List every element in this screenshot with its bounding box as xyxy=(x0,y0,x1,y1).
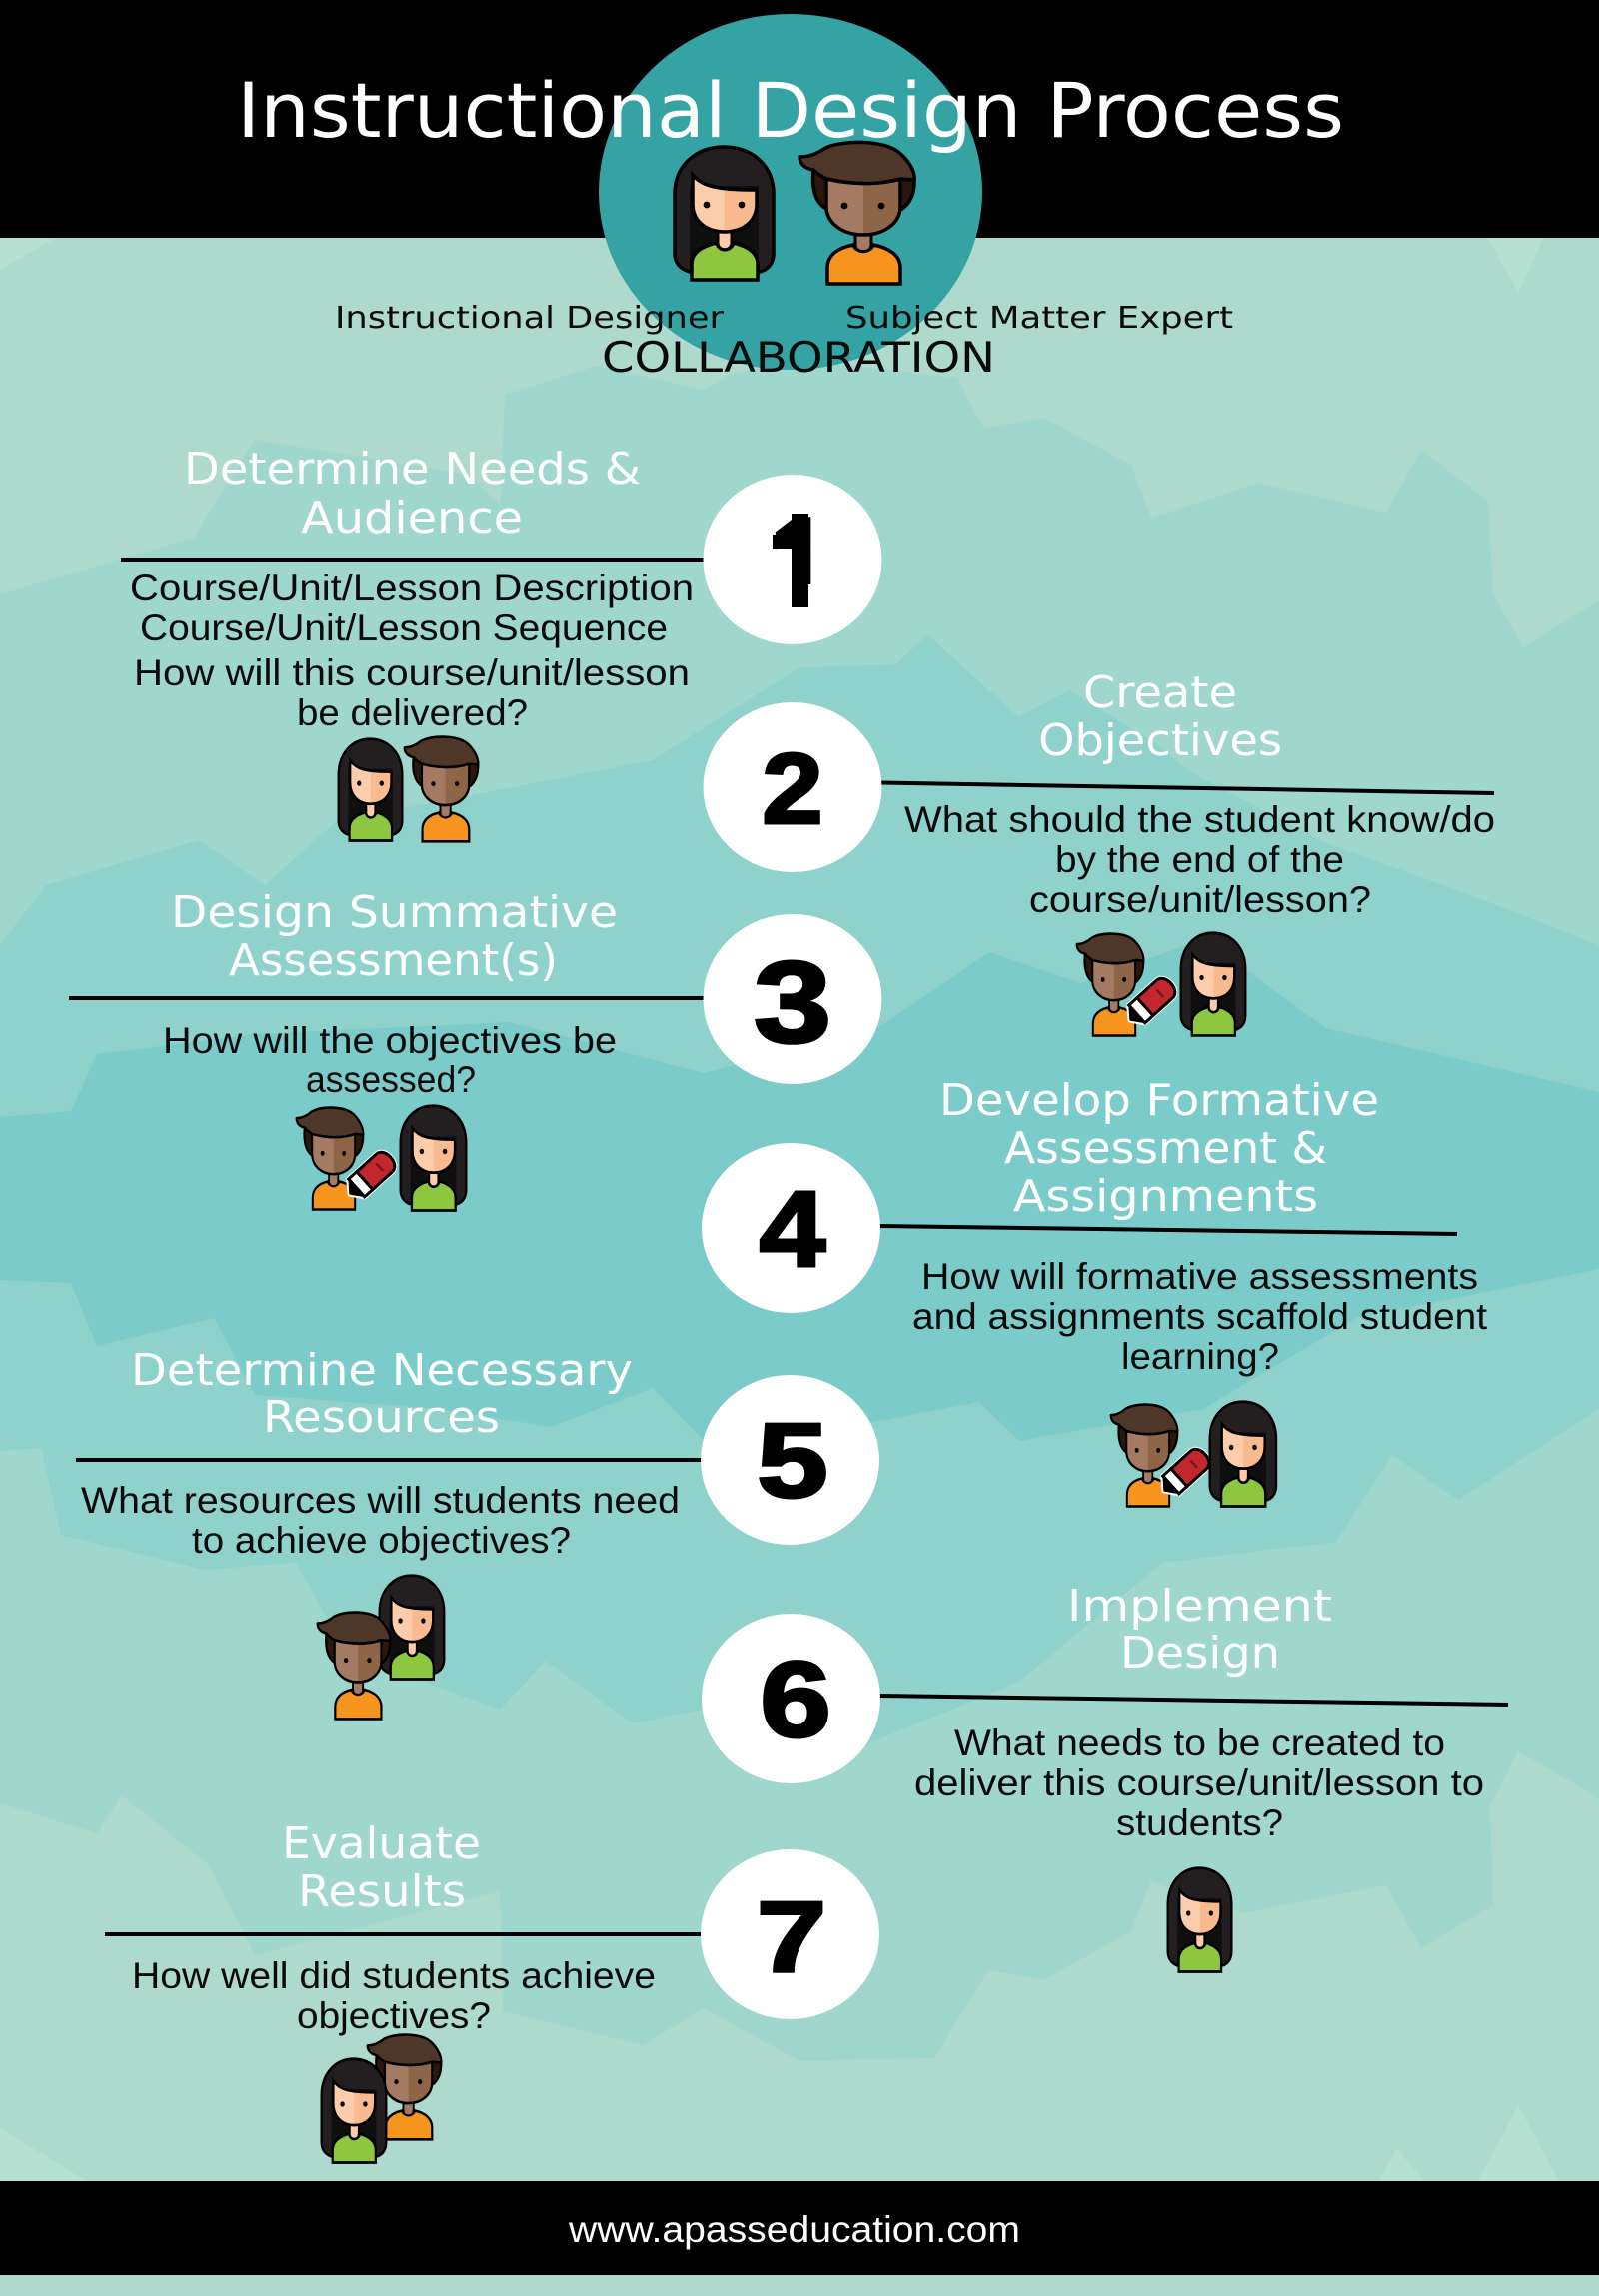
body text: How will the objectives be xyxy=(163,1020,617,1061)
body text: and assignments scaffold student xyxy=(912,1296,1488,1337)
connector line xyxy=(877,1696,1508,1705)
body text xyxy=(904,799,1495,920)
heading: Create xyxy=(1083,667,1237,718)
heading: Design Summative xyxy=(171,887,618,938)
number circle xyxy=(702,1614,880,1783)
heading: Implement xyxy=(1067,1581,1332,1632)
title: Instructional Design Process xyxy=(237,66,1344,155)
heading xyxy=(939,1075,1379,1222)
heading: Assessment & xyxy=(1004,1123,1327,1174)
footer url: www.apasseducation.com xyxy=(568,2209,1020,2250)
body text: to achieve objectives? xyxy=(192,1520,571,1561)
icon: subject matter expert xyxy=(800,142,914,284)
heading: Evaluate xyxy=(282,1818,481,1869)
icon: instructional designer xyxy=(675,147,774,280)
heading: Resources xyxy=(263,1392,500,1443)
body text: students? xyxy=(1116,1802,1283,1843)
body text: How will formative assessments xyxy=(921,1256,1478,1297)
icon: expert with pencil and designer xyxy=(1077,933,1245,1036)
body text: What resources will students need xyxy=(81,1480,680,1521)
body text xyxy=(912,1256,1488,1377)
body text: learning? xyxy=(1121,1336,1279,1377)
number circle xyxy=(701,1375,879,1545)
connector line xyxy=(877,1226,1457,1234)
header bar xyxy=(0,0,1599,238)
body text: be delivered? xyxy=(297,692,528,733)
body text xyxy=(81,1480,680,1561)
body text: How will this course/unit/lesson xyxy=(134,652,690,693)
panel: step 4 xyxy=(702,1075,1488,1507)
heading xyxy=(1067,1581,1332,1679)
body text: What should the student know/do xyxy=(904,799,1495,840)
teal collaboration circle xyxy=(599,14,982,370)
heading xyxy=(184,444,641,544)
panel: step 5 xyxy=(76,1345,879,1719)
body text: by the end of the xyxy=(1055,839,1344,880)
connector line xyxy=(105,1932,710,1936)
number circle: 7 xyxy=(757,1881,826,1993)
body text: Course/Unit/Lesson Sequence xyxy=(140,607,668,648)
connector line xyxy=(879,783,1494,793)
heading: Objectives xyxy=(1038,715,1282,766)
number circle: 2 xyxy=(762,734,823,845)
panel: step 3 xyxy=(69,887,881,1210)
heading: Assignments xyxy=(1013,1171,1318,1222)
heading xyxy=(171,887,618,986)
heading: Develop Formative xyxy=(939,1075,1379,1126)
heading: Audience xyxy=(301,493,523,544)
body text: objectives? xyxy=(297,1995,491,2036)
panel: step 6 xyxy=(702,1581,1508,1972)
heading: Assessment(s) xyxy=(229,935,558,986)
number circle: 4 xyxy=(760,1169,825,1290)
footer bar xyxy=(0,2181,1599,2275)
heading: Determine Needs & xyxy=(184,444,641,495)
heading: Design xyxy=(1120,1628,1280,1679)
body text: deliver this course/unit/lesson to xyxy=(914,1762,1484,1803)
heading: Determine Necessary xyxy=(131,1345,633,1396)
body text: What needs to be created to xyxy=(954,1722,1445,1763)
body text: assessed? xyxy=(306,1059,476,1100)
connector line xyxy=(69,996,711,1000)
body text xyxy=(132,1955,656,2036)
label: subject matter expert: Subject Matter Expert xyxy=(845,301,1233,336)
body text xyxy=(914,1722,1484,1843)
icon: expert with pencil and designer xyxy=(297,1106,466,1210)
number circle: 5 xyxy=(757,1401,828,1520)
heading xyxy=(1038,667,1282,766)
number circle xyxy=(704,702,881,872)
icon: expert behind designer xyxy=(322,2035,441,2163)
heading xyxy=(131,1345,633,1443)
connector line xyxy=(121,558,711,562)
panel: step 1 xyxy=(121,444,881,841)
number circle: 3 xyxy=(754,937,831,1067)
body text: How well did students achieve xyxy=(132,1955,656,1996)
body text: Course/Unit/Lesson Description xyxy=(130,568,694,608)
body text: course/unit/lesson? xyxy=(1029,879,1371,920)
body text xyxy=(163,1020,617,1100)
label: instructional designer: Instructional Designer xyxy=(335,301,725,336)
body text xyxy=(130,568,694,733)
number circle: 1 xyxy=(770,492,829,634)
number circle xyxy=(704,475,881,644)
icon: expert with pencil and designer xyxy=(1111,1402,1276,1507)
number circle xyxy=(702,1143,880,1313)
number circle xyxy=(704,914,881,1084)
icon: designer and expert xyxy=(339,737,478,841)
icon: designer xyxy=(1168,1868,1231,1972)
connector line xyxy=(76,1458,710,1462)
icon: designer behind expert xyxy=(318,1576,444,1719)
panel: step 7 xyxy=(105,1818,879,2163)
heading: Results xyxy=(298,1866,466,1917)
label: collaboration: COLLABORATION xyxy=(602,333,995,382)
heading xyxy=(282,1818,481,1917)
panel: step 2 xyxy=(704,667,1495,1036)
number circle: 6 xyxy=(760,1641,831,1760)
number circle xyxy=(701,1849,879,2019)
